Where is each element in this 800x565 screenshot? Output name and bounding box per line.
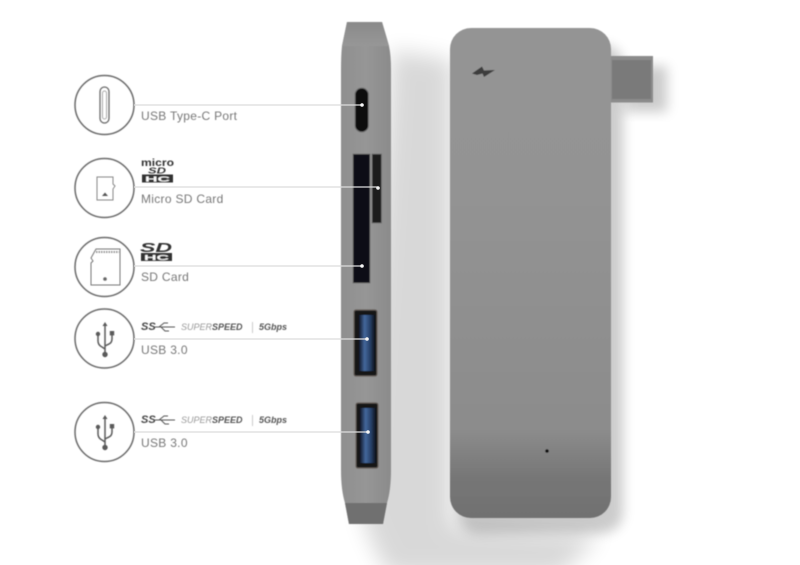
- logo: SDHC: SD: [140, 241, 172, 255]
- USB 3.0 port upper: [354, 310, 377, 376]
- label: USB Type-C Port: [141, 109, 238, 123]
- device shadows: [362, 45, 667, 565]
- leader line: [134, 431, 368, 433]
- SD card slot: [353, 154, 370, 283]
- icon: lightning bolt: [472, 66, 495, 77]
- micro SD card slot: [372, 154, 382, 223]
- logo: microSDHC: micro: [141, 158, 174, 169]
- hub body: [450, 28, 611, 518]
- logo: SuperSpeed 5Gbps: [141, 321, 287, 333]
- callout: USB 3.0 lower: [75, 402, 370, 462]
- icon: micro SD: [75, 158, 134, 218]
- logo: SuperSpeed 5Gbps: SUPERSPEED: [181, 415, 243, 425]
- icon: USB trident: [75, 402, 134, 462]
- logo: SuperSpeed 5Gbps: SS: [141, 414, 156, 426]
- label: SD Card: [141, 270, 189, 284]
- logo: SDHC: HC: [144, 253, 170, 262]
- icon: USB-C: [75, 76, 134, 134]
- leader line: [134, 104, 362, 106]
- leader line: [134, 186, 378, 188]
- USB 3.0 port lower: [356, 403, 378, 468]
- callout: USB Type-C Port: [75, 76, 364, 134]
- label: USB 3.0: [141, 343, 188, 357]
- logo: SuperSpeed 5Gbps: 5Gbps: [259, 415, 287, 425]
- icon: SD card: [75, 238, 134, 296]
- logo: SDHC: [140, 241, 172, 262]
- logo: microSDHC: SD: [148, 166, 166, 176]
- label: USB 3.0: [141, 436, 188, 450]
- USB-C port opening: [355, 88, 368, 132]
- logo: SuperSpeed 5Gbps: SS: [141, 321, 156, 333]
- side view of hub: [341, 22, 391, 524]
- callout: Micro SD Card: [75, 158, 380, 218]
- logo: microSDHC: [141, 158, 174, 184]
- leader line: [134, 338, 367, 340]
- status LED: [545, 449, 549, 453]
- callout: SD Card: [75, 238, 364, 296]
- logo: microSDHC: HC: [145, 174, 171, 184]
- icon: USB trident: [75, 309, 134, 368]
- logo: SuperSpeed 5Gbps: SUPERSPEED: [181, 322, 243, 332]
- leader line: [134, 265, 362, 267]
- logo: SuperSpeed 5Gbps: 5Gbps: [259, 322, 287, 332]
- callout: USB 3.0 upper: [75, 309, 369, 368]
- logo: SuperSpeed 5Gbps: [141, 414, 287, 426]
- label: Micro SD Card: [141, 192, 224, 206]
- USB-C plug: [608, 56, 653, 102]
- back view of hub: [450, 28, 653, 518]
